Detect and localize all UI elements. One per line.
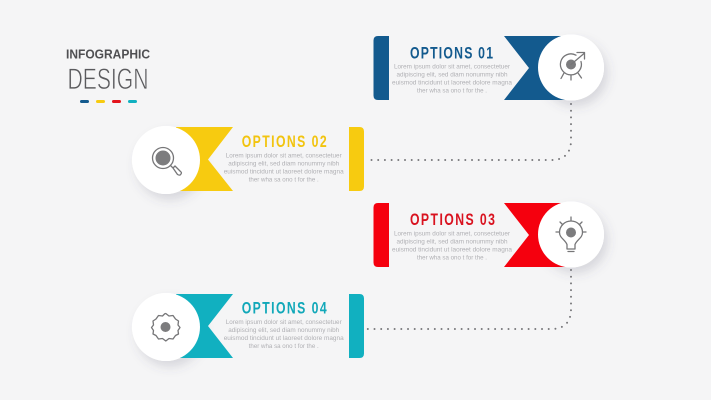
body text: Lorem ipsum dolor sit amet, consectetuer [394,64,511,70]
icon: magnifying glass [152,148,181,175]
dotted connector: option 1 to option 2 [366,104,571,160]
icon: light bulb [556,217,586,252]
heading: OPTIONS 03 [410,211,495,230]
body text [224,152,344,184]
circle [538,202,604,268]
icon: target with arrow [560,52,584,80]
icon: gear [152,314,180,341]
side bar [349,127,364,191]
body text: adipiscing elit, sed diam nonummy nibh [228,160,340,168]
body text: adipiscing elit, sed diam nonummy nibh [228,327,340,334]
side bar [349,294,364,358]
heading: OPTIONS 02 [242,133,327,152]
body text [392,230,512,262]
title block [66,46,151,103]
body text: adipiscing elit, sed diam nonummy nibh [396,238,508,246]
dotted connector: option 3 to option 4 [366,270,571,329]
ribbon [176,127,233,191]
heading: design: DESIGN [68,63,148,96]
body text [224,319,344,350]
panel: options 04 [132,293,364,361]
body text: ther wha sa ono t for the . [249,176,319,184]
heading: infographic: INFOGRAPHIC [66,46,151,62]
heading: OPTIONS 01 [410,45,493,63]
circle [132,126,200,194]
body text: euismod tincidunt ut laoreet dolore magna [224,335,344,342]
panel: options 02 [132,126,364,194]
body text: Lorem ipsum dolor sit amet, consectetuer [394,230,511,238]
ribbon [504,203,565,267]
body text: euismod tincidunt ut laoreet dolore magna [392,246,512,254]
side bar [374,203,389,267]
colour key dashes [80,100,137,103]
body text: euismod tincidunt ut laoreet dolore magna [392,80,512,86]
body text: euismod tincidunt ut laoreet dolore magna [224,168,344,176]
heading: OPTIONS 04 [242,300,327,318]
circle shadow [538,34,604,100]
panel: options 01 [374,34,604,100]
body text: Lorem ipsum dolor sit amet, consectetuer [226,319,342,326]
body text: Lorem ipsum dolor sit amet, consectetuer [226,152,342,160]
circle [538,34,604,100]
circle shadow [538,202,604,268]
side bar [374,36,389,100]
body text: ther wha sa ono t for the . [249,343,319,350]
body text [392,64,512,94]
body text: ther wha sa ono t for the . [417,88,487,94]
circle shadow [132,293,200,361]
ribbon [504,36,565,100]
ribbon [176,294,233,358]
panel: options 03 [374,202,604,268]
body text: adipiscing elit, sed diam nonummy nibh [396,72,508,78]
circle [132,293,200,361]
circle shadow [132,126,200,194]
body text: ther wha sa ono t for the . [417,254,487,262]
